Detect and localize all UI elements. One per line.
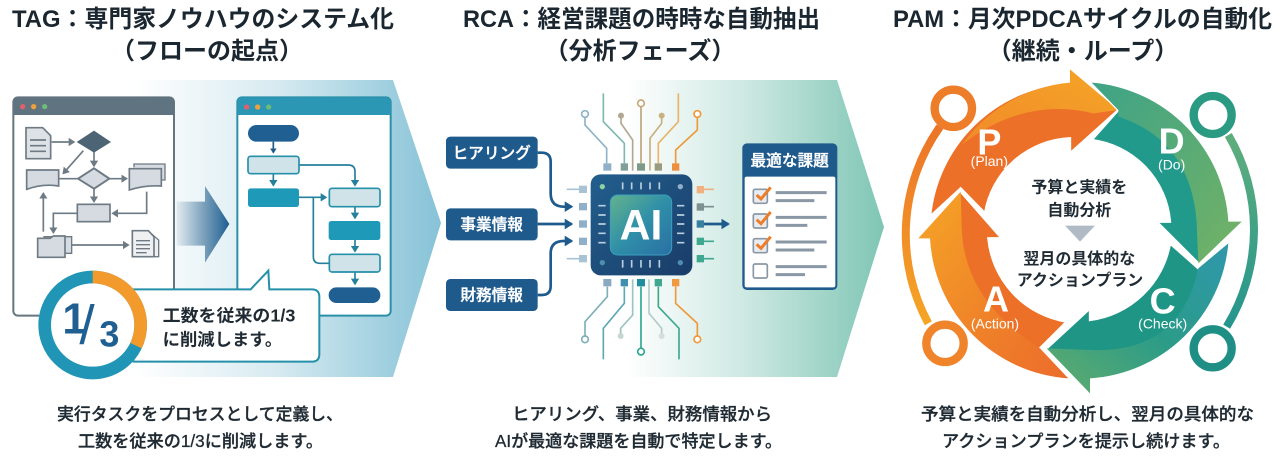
arrow: Check — [1047, 243, 1228, 393]
callout: reduce effort to one third: に削減します。 — [163, 330, 282, 350]
center text: アクションプラン — [1017, 271, 1143, 289]
arrow: Action: (Action) — [971, 315, 1019, 331]
arrows: inputs to chip — [538, 153, 572, 295]
heading: RCA: RCA：経営課題の時時な自動抽出 — [463, 6, 820, 33]
donut chart: one third: / — [79, 293, 95, 355]
window: unstructured process — [13, 97, 174, 316]
callout: reduce effort to one third: 工数を従来の1/3 — [163, 306, 296, 326]
arrow: Check: (Check) — [1138, 315, 1187, 331]
arrow: Plan — [930, 69, 1118, 217]
checklist: optimal issues: 最適な課題 — [751, 152, 829, 170]
heading: PAM: （継続・ループ） — [988, 38, 1178, 65]
text: TAG description: 工数を従来の1/3に削減します。 — [78, 431, 323, 451]
text: RCA description: ヒアリング、事業、財務情報から — [512, 404, 772, 424]
input: business info — [446, 208, 538, 240]
heading: RCA: （分析フェーズ） — [545, 37, 735, 65]
donut chart: one third — [38, 271, 147, 379]
input: business info: 事業情報 — [460, 216, 523, 234]
arrow: Plan: (Plan) — [971, 153, 1008, 169]
arrow: Action — [918, 192, 1068, 378]
text: RCA description — [495, 404, 782, 451]
panel: RCA illustration — [446, 93, 837, 359]
checklist: optimal issues — [742, 143, 837, 290]
center text: 予算と実績を — [1031, 178, 1127, 197]
arrow: Action: A — [983, 279, 1009, 320]
AI chip — [591, 174, 692, 275]
AI chip: AI — [620, 202, 662, 250]
arrow: Plan: P — [977, 121, 1001, 162]
window: structured flow — [237, 97, 391, 316]
panel: TAG chevron background — [0, 80, 441, 377]
panel: PAM PDCA cycle — [906, 69, 1254, 393]
heading: TAG: （フローの起点） — [111, 38, 303, 65]
center text: 翌月の具体的な — [1023, 250, 1135, 268]
donut chart: one third: 3 — [99, 314, 119, 355]
side arc and rings: left — [906, 90, 972, 362]
input: hearing: ヒアリング — [453, 144, 531, 162]
input: financial info: 財務情報 — [460, 287, 523, 305]
arrow: Check: C — [1150, 280, 1176, 321]
heading: RCA — [463, 6, 820, 65]
arrow: Do: (Do) — [1158, 157, 1185, 173]
text: PAM description — [921, 404, 1254, 451]
text: PAM description: アクションプランを提示し続けます。 — [942, 431, 1230, 451]
arrow: Do — [1092, 83, 1242, 263]
text: TAG description — [57, 404, 343, 451]
heading: TAG — [12, 6, 394, 65]
heading: PAM: PAM：月次PDCAサイクルの自動化 — [893, 6, 1272, 33]
arrow: chip to checklist — [704, 220, 728, 228]
chip pins — [579, 163, 704, 286]
text: TAG description: 実行タスクをプロセスとして定義し、 — [57, 404, 343, 424]
center text: 自動分析 — [1047, 200, 1111, 219]
panel: RCA chevron background — [441, 80, 884, 377]
heading: TAG: TAG：専門家ノウハウのシステム化 — [12, 6, 394, 33]
input: financial info — [446, 279, 538, 311]
arrow: Do: D — [1159, 120, 1185, 161]
text: PAM description: 予算と実績を自動分析し、翌月の具体的な — [921, 404, 1254, 424]
input: hearing — [446, 137, 538, 169]
arrow: transformation — [177, 186, 229, 263]
side arc and rings: right — [1194, 96, 1254, 367]
callout: reduce effort to one third — [133, 271, 319, 362]
circuit traces — [567, 93, 714, 359]
heading: PAM — [893, 6, 1272, 65]
donut chart: one third: 1 — [62, 295, 86, 343]
center text — [1017, 178, 1143, 289]
text: RCA description: AIが最適な課題を自動で特定します。 — [495, 431, 782, 451]
panel: TAG illustration — [13, 97, 391, 379]
